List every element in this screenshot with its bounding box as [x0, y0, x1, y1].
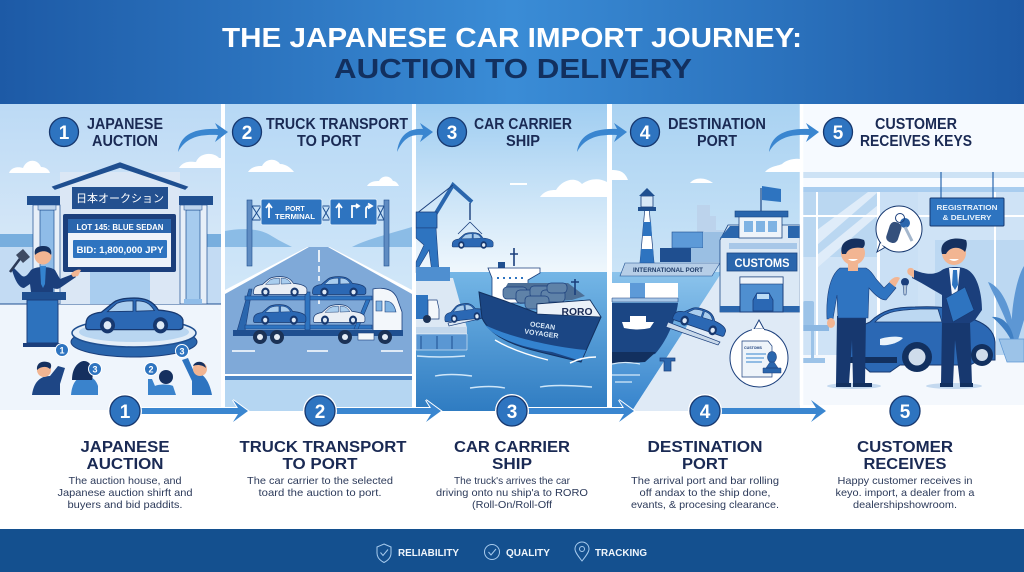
timeline marker 3 — [495, 394, 529, 428]
step text 5: RECEIVES — [864, 456, 947, 473]
blue car front three quarter — [847, 307, 995, 372]
car transporter truck — [233, 277, 403, 344]
label: CUSTOMER — [875, 116, 957, 133]
step text 3: SHIP — [492, 456, 532, 473]
paddle 3 right — [176, 344, 188, 358]
clouds — [510, 179, 607, 197]
step text 5: CUSTOMER — [857, 439, 953, 456]
panel: destination port — [612, 104, 800, 411]
dock with truck and ramp car — [416, 267, 492, 350]
ramp — [448, 313, 492, 326]
top step: 5 — [824, 116, 972, 150]
auctioneer at podium — [10, 246, 81, 347]
step text 5: Happy customer receives in — [838, 475, 973, 487]
label: roro: RORO — [562, 307, 593, 318]
white panel dividers — [223, 104, 802, 411]
curved arrow 1 to 2 — [178, 123, 228, 152]
customs building: CUSTOMS — [734, 258, 790, 270]
step text 5 — [836, 439, 975, 511]
crane lifting car — [416, 185, 493, 287]
international port platform — [620, 263, 720, 276]
dealer — [907, 239, 982, 389]
step text 4: evants, & procesing clearance. — [631, 499, 779, 511]
tracking: TRACKING — [595, 548, 647, 559]
hull — [479, 292, 601, 362]
label: AUCTION — [92, 133, 158, 150]
customs document callout — [730, 320, 788, 387]
lower blue car — [253, 305, 306, 325]
timeline marker 1: 1 — [120, 402, 131, 423]
timeline arrow 4 — [719, 400, 826, 422]
international port platform: INTERNATIONAL PORT — [633, 268, 703, 274]
customer — [827, 239, 900, 389]
title line 1: THE JAPANESE CAR IMPORT JOURNEY: — [222, 22, 802, 53]
timeline marker 4 — [688, 394, 722, 428]
step text 1 — [58, 439, 193, 511]
customs building — [720, 186, 800, 312]
timeline marker 2: 2 — [315, 402, 325, 423]
step text 5: keyo. import, a dealer from a — [836, 487, 975, 499]
label: PORT — [697, 133, 737, 150]
showroom windows — [803, 172, 1024, 405]
top step: 4: 4 — [640, 123, 651, 144]
step text 3: (Roll-On/Roll-Off — [472, 499, 552, 511]
registration and delivery sign: REGISTRATION — [936, 203, 998, 212]
panel: car carrier ship — [416, 104, 607, 411]
upper blue car — [312, 277, 366, 297]
label — [668, 116, 766, 150]
step text 1: Japanese auction shirft and — [58, 487, 193, 499]
lot display screen: LOT 145: BLUE SEDAN — [76, 222, 164, 232]
containers — [660, 232, 723, 262]
hanging car — [452, 232, 493, 249]
reception desk — [803, 301, 829, 363]
sign: japanese auction: 日本オークション — [76, 190, 164, 206]
timeline marker 3: 3 — [507, 402, 517, 423]
speech bubble with car keys — [876, 206, 922, 252]
label: SHIP — [506, 133, 540, 150]
label — [266, 116, 408, 150]
gantry sign: PORT — [285, 206, 305, 213]
timeline marker 2 — [303, 394, 337, 428]
plant — [988, 266, 1024, 362]
step text 1: JAPANESE — [80, 439, 170, 456]
label: TRUCK TRANSPORT — [266, 116, 408, 133]
tracking — [575, 542, 647, 561]
paddle 3 — [88, 362, 102, 376]
paddle 3 right: 3 — [179, 346, 185, 356]
registration and delivery sign: & DELIVERY — [942, 213, 992, 222]
step text 2: The car carrier to the selected — [247, 475, 393, 487]
label: ocean voyager: VOYAGER — [524, 329, 559, 340]
step text 1: AUCTION — [86, 456, 164, 473]
label: ocean voyager: OCEAN — [529, 321, 555, 332]
label: CAR CARRIER — [474, 116, 572, 133]
paddle 1: 1 — [59, 346, 65, 356]
label: DESTINATION — [668, 116, 766, 133]
step text 3: CAR CARRIER — [454, 439, 570, 456]
step text 4: DESTINATION — [648, 439, 762, 456]
sign: japanese auction — [72, 187, 168, 209]
quality — [484, 544, 550, 560]
step text 3: driving onto nu ship'a to RORO — [436, 487, 588, 499]
label — [87, 116, 163, 150]
clouds — [612, 159, 800, 183]
clouds and hills — [248, 160, 399, 186]
turntable platform — [71, 319, 197, 357]
step text 5: dealershipshowroom. — [853, 499, 957, 511]
top step: 1 — [50, 116, 163, 150]
timeline arrow 3 — [526, 400, 634, 422]
timeline marker 5: 5 — [900, 402, 911, 423]
step text 2: toard the auction to port. — [258, 487, 382, 499]
quality: QUALITY — [506, 548, 550, 559]
upper white car — [253, 277, 307, 297]
reliability: RELIABILITY — [398, 548, 459, 559]
top step: 3 — [438, 116, 572, 150]
header banner — [0, 0, 1024, 104]
lot display screen: BID: 1,800,000 JPY — [76, 245, 164, 256]
reliability — [377, 544, 459, 562]
label: TO PORT — [297, 133, 361, 150]
ramp and blue car — [666, 301, 730, 345]
paddle 2 — [144, 362, 158, 376]
timeline arrow 1 — [139, 400, 248, 422]
step text 2: TO PORT — [282, 456, 358, 473]
top step: 5: 5 — [833, 123, 844, 144]
step text 2 — [240, 439, 407, 499]
panel: customer receives keys — [803, 104, 1024, 405]
panel: japanese auction — [0, 104, 221, 410]
top step: 3: 3 — [447, 123, 457, 144]
registration and delivery sign — [930, 172, 1004, 226]
panel: truck transport — [225, 104, 412, 411]
curved arrow 4 to 5 — [769, 123, 819, 152]
gantry sign — [247, 199, 389, 266]
ramp car — [443, 301, 487, 324]
timeline arrow 2 — [334, 400, 441, 422]
top step: 2: 2 — [242, 123, 252, 144]
step text 1: The auction house, and — [68, 475, 182, 487]
customs document callout: CUSTOMS — [744, 346, 763, 350]
label: RECEIVES KEYS — [860, 133, 972, 150]
top step: 4 — [630, 116, 766, 150]
distant ship — [697, 205, 727, 262]
bottom timeline — [108, 394, 920, 428]
blue sedan on display — [86, 298, 183, 333]
flag — [760, 188, 762, 211]
lower white car — [313, 305, 365, 325]
top step: 1: 1 — [59, 123, 70, 144]
handed over key — [901, 278, 909, 295]
bidders with paddles — [32, 344, 212, 395]
label — [474, 116, 572, 150]
waves — [417, 356, 592, 388]
paddle 1 — [56, 344, 68, 356]
timeline marker 5 — [890, 396, 920, 426]
footer bar — [0, 529, 1024, 572]
step text 1: buyers and bid paddits. — [68, 499, 182, 511]
title line 2: AUCTION TO DELIVERY — [334, 53, 692, 84]
curved arrow 2 to 3 — [397, 123, 433, 152]
paddle 2: 2 — [148, 364, 154, 374]
road — [225, 247, 412, 375]
timeline marker 4: 4 — [700, 402, 711, 423]
step text 3 — [436, 439, 588, 511]
top step: 2 — [232, 116, 408, 150]
step text 4: The arrival port and bar rolling — [631, 475, 779, 487]
water — [612, 272, 722, 411]
curved arrow 3 to 4 — [577, 123, 627, 152]
gantry sign: TERMINAL — [275, 214, 316, 221]
roro ship — [479, 248, 601, 363]
step text 2: TRUCK TRANSPORT — [240, 439, 407, 456]
bollard — [660, 358, 675, 371]
label — [860, 116, 972, 150]
gavel — [10, 256, 22, 272]
step text 4: PORT — [682, 456, 728, 473]
auction house building — [27, 163, 213, 304]
label: JAPANESE — [87, 116, 163, 133]
lighthouse — [638, 188, 656, 263]
docked ship — [612, 283, 678, 382]
clouds — [9, 154, 221, 173]
paddle 3: 3 — [92, 364, 98, 374]
step text 3: The truck's arrives the car — [454, 475, 570, 487]
lot display screen — [63, 214, 176, 272]
timeline marker 1 — [108, 394, 142, 428]
label: ocean voyager — [524, 321, 560, 340]
step text 4: off andax to the ship done, — [640, 487, 770, 499]
customs sign — [727, 253, 797, 271]
step text 4 — [631, 439, 779, 511]
quay — [632, 272, 800, 411]
garage — [740, 277, 783, 312]
